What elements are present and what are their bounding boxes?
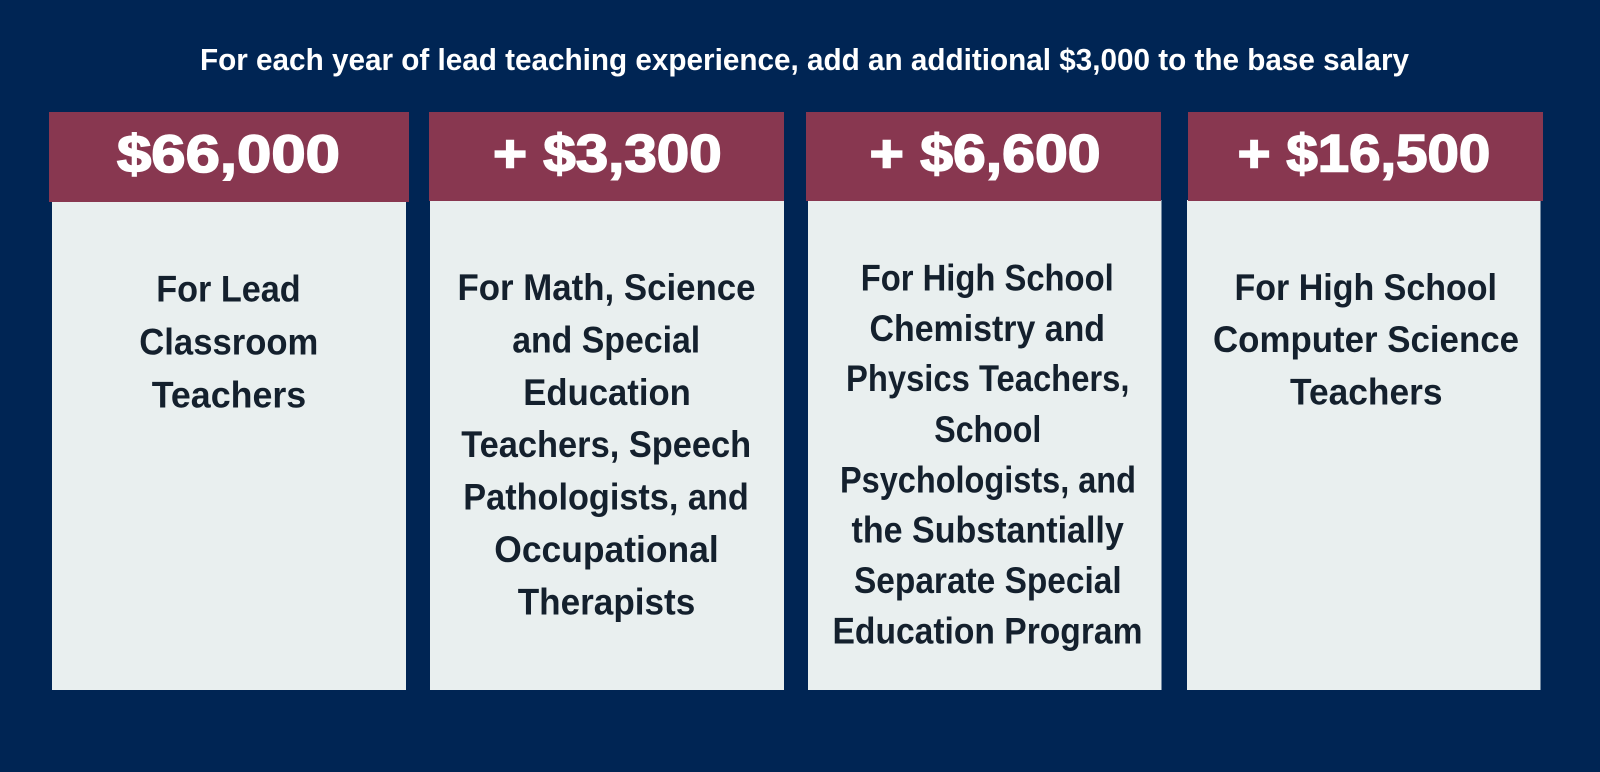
description: Separate Special xyxy=(854,560,1122,601)
description: For Math, Science xyxy=(458,267,756,308)
description: For High School xyxy=(861,257,1114,298)
panel body xyxy=(52,201,406,690)
amount header: + $16,500 xyxy=(1238,124,1490,184)
description xyxy=(139,269,318,416)
amount header xyxy=(429,112,784,201)
panel: high school computer science xyxy=(1187,112,1543,690)
description: Education Program xyxy=(832,610,1142,651)
description: and Special xyxy=(512,319,700,360)
amount header: + $3,300 xyxy=(493,124,722,184)
amount header xyxy=(1188,112,1543,201)
description: Therapists xyxy=(518,581,695,622)
description: Physics Teachers, xyxy=(846,358,1130,399)
description: For High School xyxy=(1234,267,1497,308)
description: the Substantially xyxy=(852,510,1124,551)
description: Education xyxy=(523,372,691,413)
description: School xyxy=(934,409,1041,450)
amount header: $66,000 xyxy=(117,125,340,184)
description xyxy=(1213,267,1519,412)
description: Teachers, Speech xyxy=(461,424,751,465)
panel body xyxy=(808,200,1162,690)
amount header xyxy=(806,112,1161,201)
description: For Lead xyxy=(156,269,301,310)
panel body xyxy=(430,200,784,690)
description: Psychologists, and xyxy=(840,459,1136,500)
description: Teachers xyxy=(152,375,306,416)
description: Occupational xyxy=(494,529,719,570)
description: Classroom xyxy=(139,322,318,363)
panel: lead classroom teachers xyxy=(49,112,409,690)
panel: high school chemistry and physics xyxy=(806,112,1162,690)
description xyxy=(832,257,1142,651)
description: Chemistry and xyxy=(870,308,1105,349)
description: Computer Science xyxy=(1213,319,1519,360)
panel: math, science and special education xyxy=(429,112,784,690)
description xyxy=(458,267,756,622)
panel body xyxy=(1187,200,1540,690)
amount header: + $6,600 xyxy=(870,124,1100,184)
amount header xyxy=(49,112,409,202)
description: Teachers xyxy=(1290,371,1442,412)
title: For each year of lead teaching experience, add an additional $3,000 to the base salary xyxy=(200,42,1410,77)
description: Pathologists, and xyxy=(463,477,749,518)
